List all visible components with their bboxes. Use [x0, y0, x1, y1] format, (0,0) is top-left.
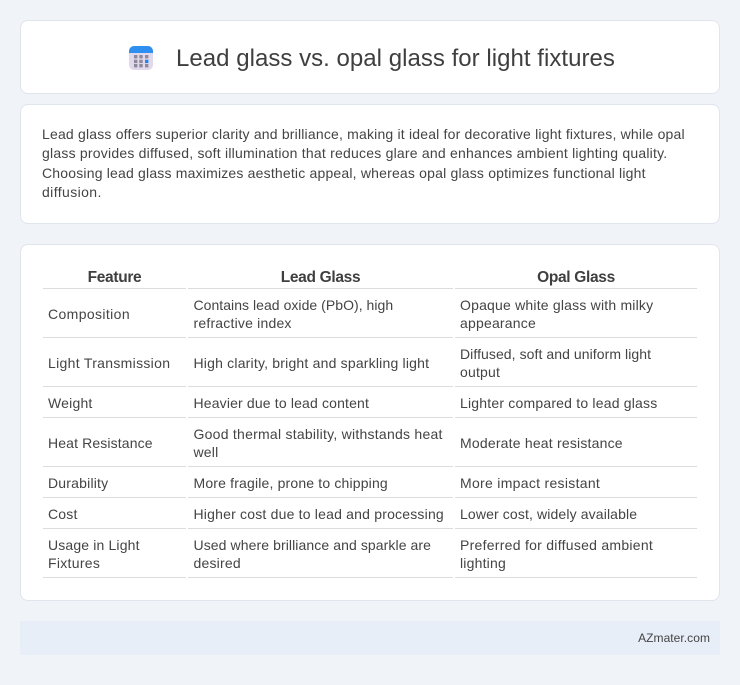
- column headings: Opal Glass: [537, 269, 615, 286]
- row: usage in light fixtures: lighting: [460, 555, 506, 571]
- icon: calendar: [129, 46, 153, 70]
- title: Lead glass vs. opal glass for light fixtures: [176, 45, 615, 72]
- row: light transmission: High clarity, bright and sparkling light: [194, 355, 429, 371]
- row: heat resistance: Heat Resistance: [48, 435, 153, 451]
- comparison table: [43, 269, 697, 578]
- row: composition: [48, 297, 654, 331]
- row: composition: Contains lead oxide (PbO), high: [194, 297, 393, 313]
- summary text: glass provides diffused, soft illumination that reduces glare and enhances ambient lighting quality.: [42, 145, 667, 161]
- summary text: Choosing lead glass maximizes aesthetic appeal, whereas opal glass optimizes functional light: [42, 165, 646, 181]
- row: usage in light fixtures: Usage in Light: [48, 537, 140, 553]
- summary text: Lead glass offers superior clarity and brilliance, making it ideal for decorative light fixtures, while opal: [42, 126, 685, 142]
- column headings: Feature: [88, 269, 141, 286]
- row: durability: More impact resistant: [460, 475, 600, 491]
- row: usage in light fixtures: Fixtures: [48, 555, 100, 571]
- row: usage in light fixtures: desired: [194, 555, 241, 571]
- row: durability: [48, 475, 600, 491]
- row: cost: Higher cost due to lead and processing: [194, 506, 444, 522]
- row: heat resistance: [48, 426, 623, 460]
- row: composition: appearance: [460, 315, 536, 331]
- row: weight: Lighter compared to lead glass: [460, 395, 657, 411]
- summary text: diffusion.: [42, 184, 102, 200]
- row: usage in light fixtures: [48, 537, 653, 571]
- row: composition: Opaque white glass with milky: [460, 297, 653, 313]
- row: light transmission: [48, 346, 651, 380]
- row: heat resistance: Good thermal stability, withstands heat: [194, 426, 443, 442]
- footer bar: [20, 621, 720, 655]
- row: cost: [48, 506, 637, 522]
- row: composition: Composition: [48, 306, 130, 322]
- row: cost: Lower cost, widely available: [460, 506, 637, 522]
- column headings: [88, 269, 615, 286]
- row: light transmission: Diffused, soft and uniform light: [460, 346, 651, 362]
- header card: [20, 20, 720, 94]
- row: cost: Cost: [48, 506, 78, 522]
- column headings: Lead Glass: [281, 269, 360, 286]
- panel: summary: [20, 104, 720, 224]
- row: durability: Durability: [48, 475, 108, 491]
- footer credit: AZmater.com: [638, 631, 710, 645]
- row: weight: Weight: [48, 395, 93, 411]
- row: heat resistance: well: [194, 444, 218, 460]
- row: usage in light fixtures: Preferred for diffused ambient: [460, 537, 653, 553]
- panel: comparison table: [20, 244, 720, 601]
- row: usage in light fixtures: Used where brilliance and sparkle are: [194, 537, 431, 553]
- row: weight: Heavier due to lead content: [194, 395, 369, 411]
- row: composition: refractive index: [194, 315, 292, 331]
- row: durability: More fragile, prone to chipping: [194, 475, 388, 491]
- summary text: [42, 126, 685, 200]
- row: light transmission: Light Transmission: [48, 355, 170, 371]
- row: heat resistance: Moderate heat resistance: [460, 435, 623, 451]
- row: light transmission: output: [460, 364, 500, 380]
- row: weight: [48, 395, 657, 411]
